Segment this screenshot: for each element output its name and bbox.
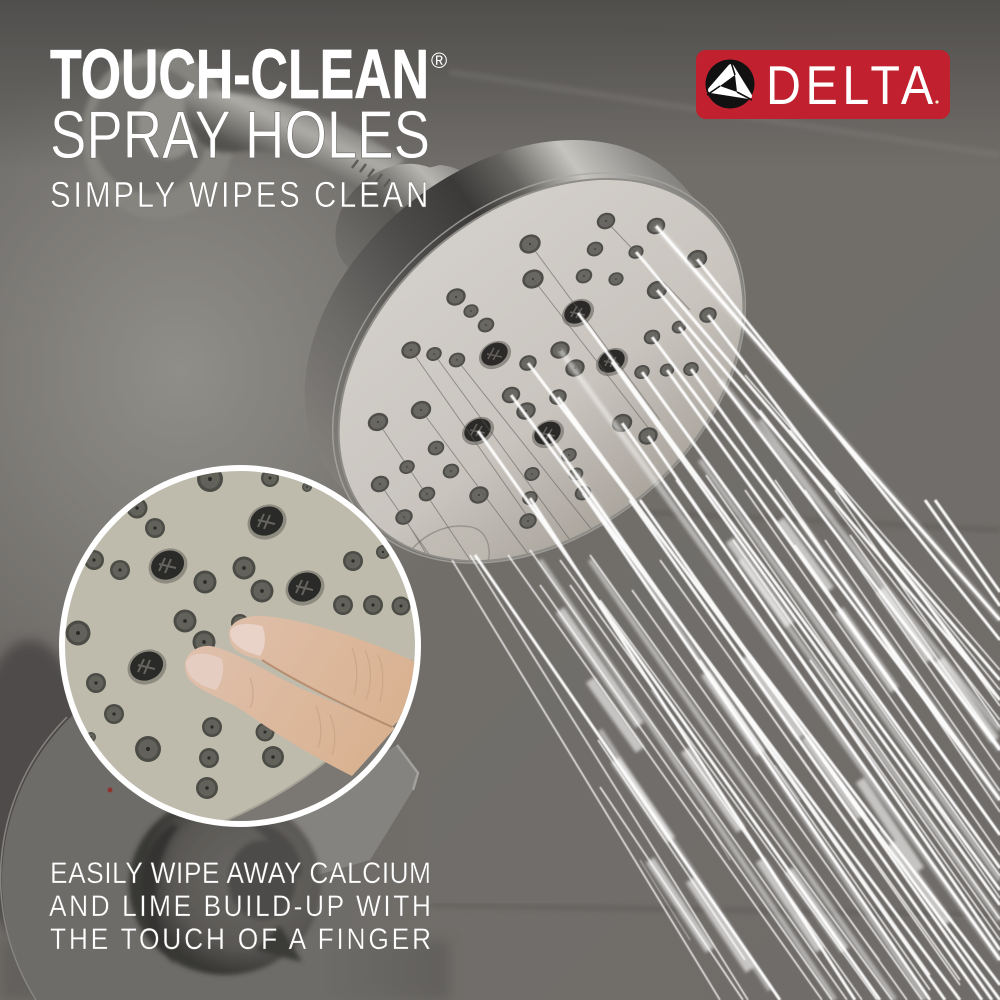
spray nozzles — [365, 210, 719, 532]
shower head body — [305, 140, 746, 564]
shower arm and wall flange — [82, 51, 405, 219]
shower head face — [338, 178, 744, 562]
thin jets on the face — [378, 221, 690, 570]
valve trim plate and handle — [0, 640, 458, 1000]
threaded pipe section — [352, 160, 390, 187]
icon: Delta triangle mark — [706, 60, 754, 108]
water spray streaks — [452, 226, 1000, 1000]
selector ring on face — [412, 525, 490, 560]
magnified nozzles — [66, 466, 410, 799]
title: Touch-Clean: TOUCH-CLEAN — [50, 35, 429, 113]
white ring — [59, 465, 421, 827]
inset magnifier circle — [59, 465, 421, 827]
subtitle: SIMPLY WIPES CLEAN — [50, 176, 428, 216]
wipe-away caption: AND LIME BUILD-UP WITH — [49, 888, 431, 922]
finger knuckle creases — [250, 648, 383, 755]
title: Spray Holes: SPRAY HOLES — [50, 97, 430, 173]
valve handle — [129, 795, 321, 975]
wipe-away caption — [49, 855, 431, 955]
upper finger — [229, 616, 415, 727]
logo wordmark: DELTA — [766, 54, 934, 116]
registered mark: ® — [431, 48, 447, 73]
wipe-away caption: THE TOUCH OF A FINGER — [50, 921, 431, 955]
area beyond the face edge — [226, 678, 412, 821]
bright jets — [475, 226, 1000, 1000]
shower neck — [336, 164, 460, 268]
wipe-away caption: EASILY WIPE AWAY CALCIUM — [50, 855, 431, 889]
valve lever — [260, 745, 418, 880]
thin jets — [452, 375, 1000, 1000]
Delta logo badge — [696, 50, 950, 119]
faint jets — [640, 690, 970, 960]
soft clumped spray — [560, 520, 995, 970]
lower finger — [185, 646, 395, 776]
fingers wiping the face — [185, 616, 415, 776]
